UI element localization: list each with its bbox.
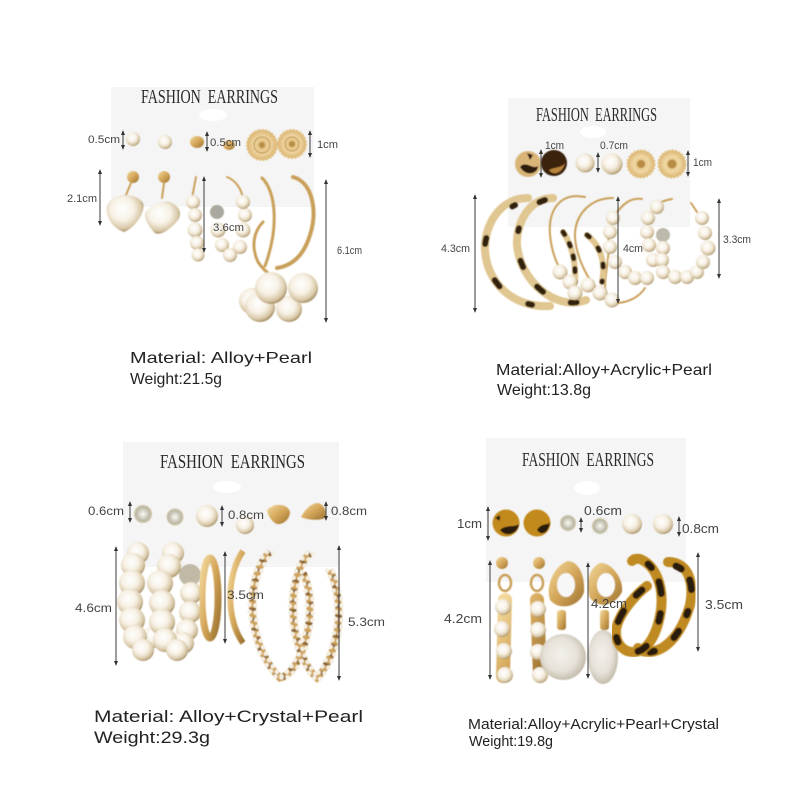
panel: set 3 alloy crystal pearl — [75, 442, 385, 747]
material text set 3: Weight:29.3g — [94, 728, 210, 747]
dimension labels set 3: 0.8cm — [228, 508, 264, 522]
heart pearl drop earrings — [107, 171, 180, 234]
studs row set 2 — [515, 150, 686, 178]
material text set 2 — [496, 362, 712, 399]
dimension labels set 3: 0.6cm — [88, 504, 124, 518]
material text set 2: Material:Alloy+Acrylic+Pearl — [496, 362, 712, 379]
panel: set 1 alloy and pearl — [67, 86, 362, 388]
dimension labels set 2: 4cm — [623, 243, 643, 255]
card 3 — [123, 442, 339, 567]
dimension arrows set 3 — [116, 502, 339, 680]
panel: set 2 alloy acrylic pearl — [441, 98, 751, 399]
dimension labels set 1 — [67, 134, 362, 257]
gold textured hoops set 3 — [202, 551, 243, 643]
material text set 4 — [468, 717, 719, 750]
dimension labels set 3: 5.3cm — [348, 615, 385, 629]
material text set 1: Weight:21.5g — [130, 371, 222, 388]
tortoise hoops set 4 — [616, 559, 691, 652]
dimension arrows set 4 — [488, 507, 698, 679]
material text set 1: Material: Alloy+Pearl — [130, 350, 312, 367]
dimension labels set 4: 3.5cm — [705, 597, 743, 612]
card 1 — [111, 87, 314, 207]
dimension labels set 1: 6.1cm — [337, 245, 362, 257]
pearl hoops set 2 — [552, 199, 716, 308]
pearl bar earrings — [494, 557, 548, 683]
card 4 title: FASHION EARRINGS — [522, 449, 654, 471]
dimension labels set 3: 0.8cm — [331, 504, 367, 518]
dimension labels set 4: 0.6cm — [584, 503, 622, 518]
dimension labels set 3: 4.6cm — [75, 601, 112, 615]
material text set 1 — [130, 350, 312, 388]
dimension labels set 2: 4.3cm — [441, 243, 470, 255]
dimension labels set 1: 0.5cm — [88, 134, 120, 146]
dimension labels set 2 — [441, 140, 751, 255]
dimension labels set 4: 4.2cm — [444, 611, 482, 626]
dimension labels set 3: 3.5cm — [227, 588, 264, 602]
big gold hoops with baroque pearls — [239, 177, 318, 322]
material text set 3: Material: Alloy+Crystal+Pearl — [94, 707, 363, 726]
material text set 4: Material:Alloy+Acrylic+Pearl+Crystal — [468, 717, 719, 733]
dimension labels set 2: 3.3cm — [723, 234, 751, 246]
material text set 2: Weight:13.8g — [497, 382, 591, 399]
card 2 title: FASHION EARRINGS — [536, 104, 657, 126]
dimension arrows set 1 — [100, 131, 326, 322]
dimension labels set 3 — [75, 504, 385, 629]
dimension labels set 4: 0.8cm — [682, 521, 719, 536]
dimension labels set 1: 3.6cm — [213, 222, 244, 234]
dimension labels set 2: 0.7cm — [600, 140, 628, 152]
studs row set 3 — [134, 503, 326, 534]
panel: set 4 alloy acrylic pearl crystal — [444, 438, 743, 750]
dimension labels set 2: 1cm — [545, 140, 564, 152]
dimension labels set 1: 2.1cm — [67, 193, 97, 205]
gold loop and coin pearl earrings — [540, 561, 622, 684]
studs row set 1 — [126, 130, 306, 160]
card 1 title: FASHION EARRINGS — [141, 86, 278, 108]
dimension labels set 1: 1cm — [317, 139, 338, 151]
card 3 title: FASHION EARRINGS — [160, 451, 305, 473]
dimension labels set 4: 1cm — [457, 516, 482, 531]
studs row set 4 — [492, 510, 673, 536]
tortoise hoops set 2 — [485, 196, 613, 306]
dimension labels set 1: 0.5cm — [210, 137, 241, 149]
material text set 3 — [94, 707, 363, 747]
dimension labels set 4: 4.2cm — [591, 596, 627, 611]
dimension labels set 2: 1cm — [693, 157, 712, 169]
pearl hoops set 1 — [186, 177, 252, 262]
large pearl hoops set 3 — [117, 542, 202, 661]
card 2 — [508, 98, 690, 227]
dimension labels set 4 — [444, 503, 743, 626]
material text set 4: Weight:19.8g — [469, 734, 553, 750]
twisted hoops with seed pearls — [249, 552, 342, 679]
dimension arrows set 2 — [475, 150, 719, 312]
card 4 — [486, 438, 686, 582]
